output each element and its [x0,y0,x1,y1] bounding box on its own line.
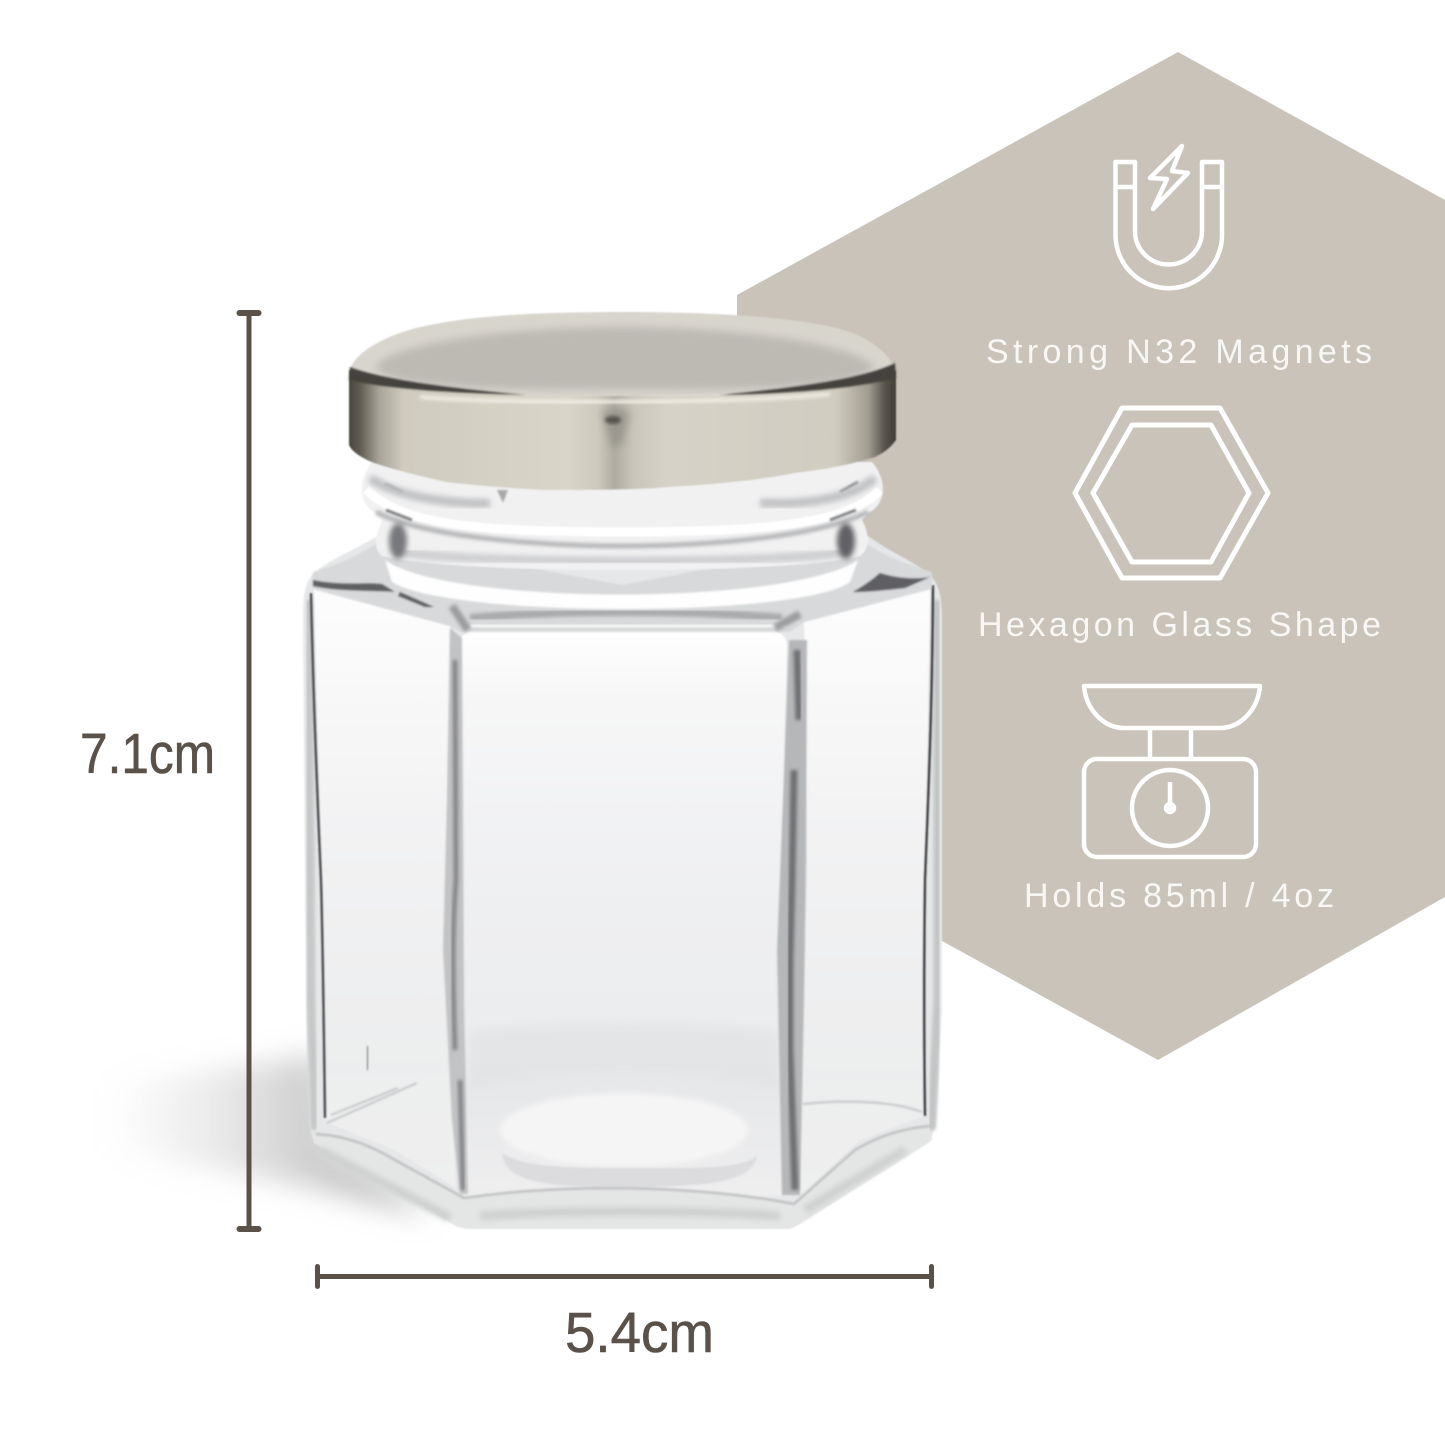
width label: 5.4cm [565,1301,714,1365]
right dark shoulder wedge [853,573,930,592]
right edge highlight [931,600,938,1130]
right face [800,590,930,1195]
height label: 7.1cm [80,722,215,786]
label: capacity: Holds 85ml / 4oz [1024,877,1334,915]
left edge dark line [311,593,325,1118]
small glass mark [367,1046,368,1070]
label: hexagon shape: Hexagon Glass Shape [978,606,1381,644]
left dark shoulder streak [313,580,434,607]
icon: hexagon glass shape [1075,408,1268,578]
jar neck [362,462,883,570]
base disc highlight [500,1093,748,1167]
icon: magnet with lightning bolt [1116,146,1222,288]
lid reflection spot [602,409,630,447]
dark patch left [389,523,407,559]
right pillar [777,640,807,1195]
floor glass bands [470,1022,778,1090]
neck thread band [366,490,880,532]
base disc crescent [502,1153,757,1187]
icon: weighing scale [1084,686,1260,857]
jar cast shadow [110,1055,430,1215]
label: strong magnets: Strong N32 Magnets [986,333,1372,371]
glass jar photo illustration [303,312,942,1229]
height dimension line [236,310,262,1232]
jar shoulder [312,540,932,632]
right edge dark line [924,585,933,1116]
lid dark wedges [349,363,896,395]
width dimension line [315,1264,934,1289]
panel: hexagon features background [737,52,1445,1060]
dark patch right [837,523,855,559]
base band [313,1126,932,1229]
lid top [349,312,896,396]
side floor creases [327,1083,922,1123]
left face [314,590,456,1188]
left edge highlight [308,600,315,1130]
left pillar [443,628,468,1194]
neck texture band [400,552,845,561]
centre face [461,631,787,1196]
jar body [303,536,942,1229]
lid side top highlight [420,394,830,402]
lid side [349,363,896,490]
